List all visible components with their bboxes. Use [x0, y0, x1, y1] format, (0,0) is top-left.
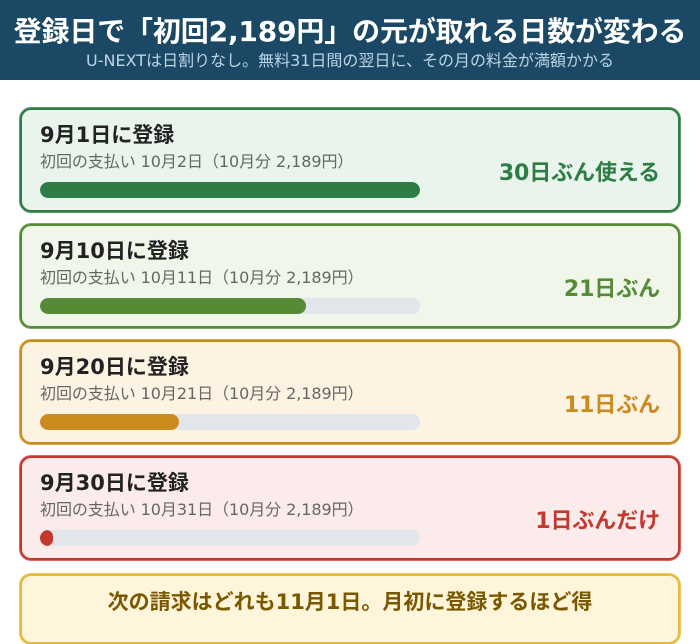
callout: next billing note — [20, 574, 680, 644]
first payment: 初回の支払い 10月31日（10月分 2,189円） — [40, 500, 364, 519]
signup date: 9月10日に登録 — [40, 239, 189, 263]
subtitle: U-NEXTは日割りなし。無料31日間の翌日に、その月の料金が満額かかる — [86, 51, 614, 70]
header band — [0, 0, 700, 80]
callout: next billing note: 次の請求はどれも11月1日。月初に登録するほど得 — [108, 590, 592, 614]
result label: 1日ぶんだけ — [535, 509, 660, 534]
signup date: 9月1日に登録 — [40, 123, 174, 147]
result label: 21日ぶん — [564, 277, 660, 302]
first payment: 初回の支払い 10月21日（10月分 2,189円） — [40, 384, 364, 403]
signup date: 9月20日に登録 — [40, 355, 189, 379]
progress bar: 11 days — [40, 414, 420, 430]
panel: September 20 signup — [20, 340, 680, 444]
result label: 30日ぶん使える — [499, 161, 660, 186]
panel: September 30 signup — [20, 456, 680, 560]
first payment: 初回の支払い 10月11日（10月分 2,189円） — [40, 268, 364, 287]
panel: September 10 signup — [20, 224, 680, 328]
title: 登録日で「初回2,189円」の元が取れる日数が変わる — [14, 15, 686, 48]
first payment: 初回の支払い 10月2日（10月分 2,189円） — [40, 152, 353, 171]
result label: 11日ぶん — [564, 393, 660, 418]
progress bar: 1 day — [40, 530, 420, 546]
panel: September 1 signup — [20, 108, 680, 212]
progress bar: 30 days — [40, 182, 420, 198]
progress bar: 21 days — [40, 298, 420, 314]
signup date: 9月30日に登録 — [40, 471, 189, 495]
